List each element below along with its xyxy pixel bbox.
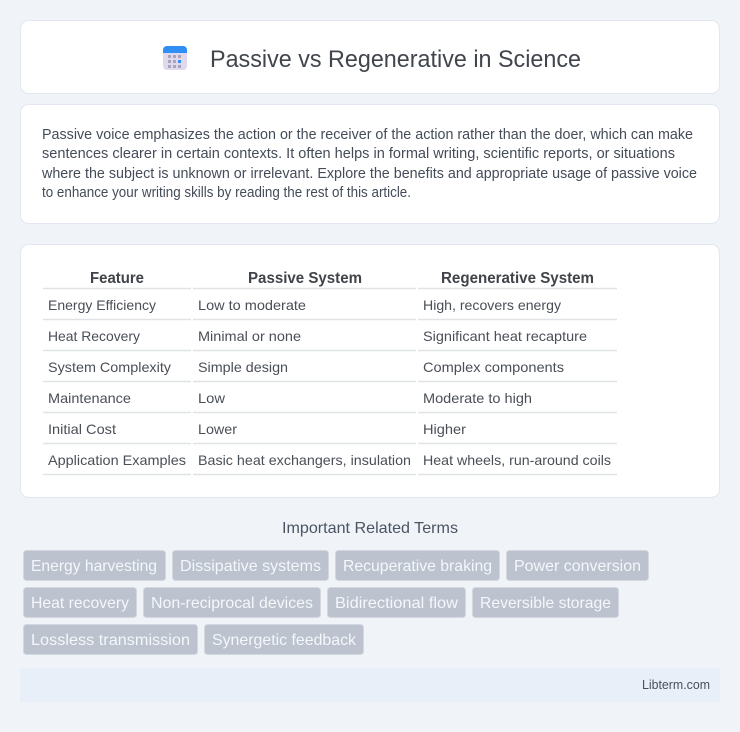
row: heat recovery: Significant heat recapture <box>423 328 587 344</box>
heading: related terms: Important Related Terms <box>282 520 458 537</box>
row: initial cost: Initial Cost <box>48 421 116 437</box>
row: system complexity: Complex components <box>423 359 564 375</box>
tag: heat recovery: Heat recovery <box>31 595 129 612</box>
tag: synergetic feedback <box>204 624 364 654</box>
panel: intro text <box>20 104 720 224</box>
table header <box>90 270 594 287</box>
text block: intro paragraph: Passive voice emphasizes the action or the receiver of the action rather than the doer, which can make <box>42 127 693 143</box>
panel: header <box>20 20 720 94</box>
text block: intro paragraph: sentences clearer in certain contexts. It often helps in formal writing, scientific reports, or situations <box>42 146 675 162</box>
tag: non-reciprocal devices <box>144 588 320 618</box>
row: application examples: Application Examples <box>48 452 186 468</box>
tag: heat recovery <box>24 588 136 618</box>
row: system complexity: Simple design <box>198 359 288 375</box>
tag: energy harvesting: Energy harvesting <box>31 558 157 575</box>
text block: intro paragraph: where the subject is unknown or irrelevant. Explore the benefits and appropriate usage of passive voice <box>41 166 697 182</box>
tag: recuperative braking: Recuperative braking <box>343 558 492 575</box>
tag: reversible storage <box>472 588 618 618</box>
table header: Passive System <box>248 270 362 287</box>
row: application examples: Basic heat exchangers, insulation <box>198 452 411 468</box>
tag: reversible storage: Reversible storage <box>480 595 611 612</box>
row: maintenance <box>48 390 532 406</box>
row: heat recovery: Heat Recovery <box>48 328 140 344</box>
row: maintenance: Moderate to high <box>423 390 532 406</box>
row: energy efficiency: High, recovers energy <box>423 297 561 313</box>
icon: calendar <box>163 46 187 70</box>
footer <box>20 668 720 702</box>
tag: recuperative braking <box>336 550 500 580</box>
row: heat recovery: Minimal or none <box>198 328 301 344</box>
text block: intro paragraph: to enhance your writing skills by reading the rest of this article. <box>42 185 411 201</box>
footer credit: Libterm.com <box>642 678 710 692</box>
tag: power conversion <box>506 550 648 580</box>
text block: intro paragraph <box>41 127 697 201</box>
row: initial cost: Higher <box>423 421 466 437</box>
row: maintenance: Maintenance <box>48 390 131 406</box>
tags: related terms <box>24 550 648 654</box>
title: Passive vs Regenerative in Science <box>210 46 581 73</box>
tag: dissipative systems <box>172 550 328 580</box>
tag: dissipative systems: Dissipative systems <box>180 558 321 575</box>
tag: non-reciprocal devices: Non-reciprocal devices <box>151 595 313 612</box>
row: energy efficiency: Low to moderate <box>198 297 306 313</box>
panel: comparison table <box>20 244 720 498</box>
row: maintenance: Low <box>198 390 226 406</box>
row: energy efficiency <box>48 297 561 313</box>
tag: lossless transmission: Lossless transmission <box>31 632 190 649</box>
table header: Feature <box>90 270 144 287</box>
row: system complexity <box>48 359 564 375</box>
tag: bidirectional flow <box>328 588 466 618</box>
tag: lossless transmission <box>24 624 198 654</box>
table header: Regenerative System <box>441 270 594 287</box>
row: application examples: Heat wheels, run-around coils <box>423 452 611 468</box>
row: system complexity: System Complexity <box>48 359 171 375</box>
tag: energy harvesting <box>24 550 166 580</box>
row: application examples <box>48 452 611 468</box>
row: heat recovery <box>48 328 587 344</box>
row: initial cost: Lower <box>198 421 237 437</box>
row: energy efficiency: Energy Efficiency <box>48 297 156 313</box>
tag: bidirectional flow: Bidirectional flow <box>335 595 458 612</box>
tag: synergetic feedback: Synergetic feedback <box>212 632 357 649</box>
row: initial cost <box>48 421 466 437</box>
tag: power conversion: Power conversion <box>514 558 641 575</box>
